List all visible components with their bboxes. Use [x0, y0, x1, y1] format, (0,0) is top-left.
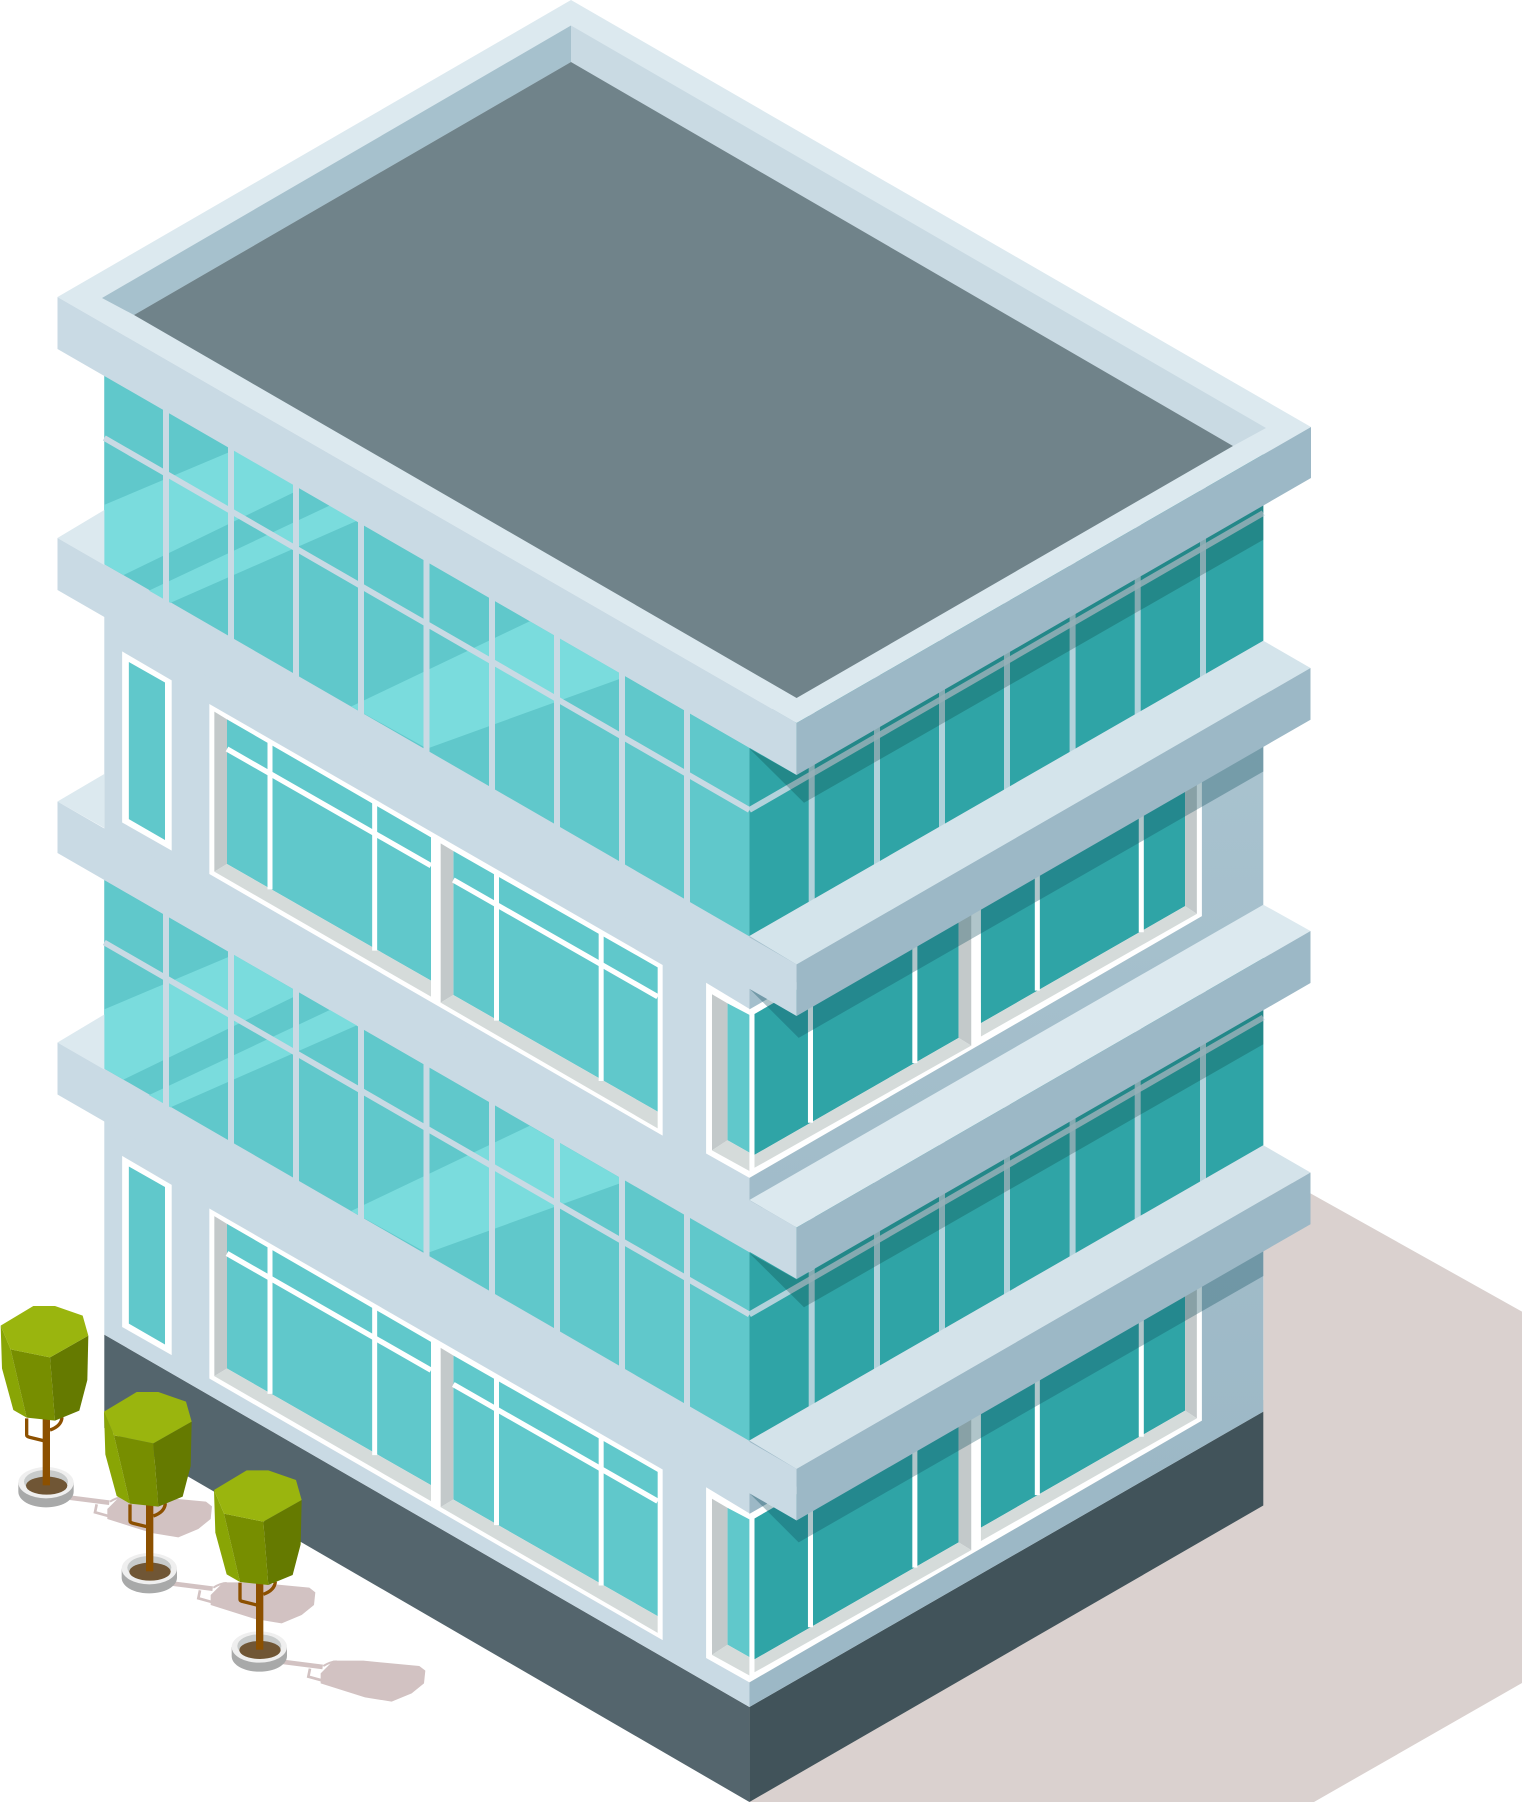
lower slab — [58, 1014, 1310, 1520]
building walls — [104, 350, 1263, 1707]
upper floor: glazing and windows — [104, 376, 1263, 1178]
ground shadow — [749, 1167, 1522, 1802]
building base — [104, 1335, 1263, 1802]
upper slab — [58, 510, 1310, 1016]
trees in planters — [1, 1306, 302, 1672]
tree shadows — [70, 1496, 425, 1702]
lower floor: glazing and windows — [104, 880, 1263, 1682]
middle slab — [58, 774, 1310, 1279]
roof — [58, 0, 1311, 775]
